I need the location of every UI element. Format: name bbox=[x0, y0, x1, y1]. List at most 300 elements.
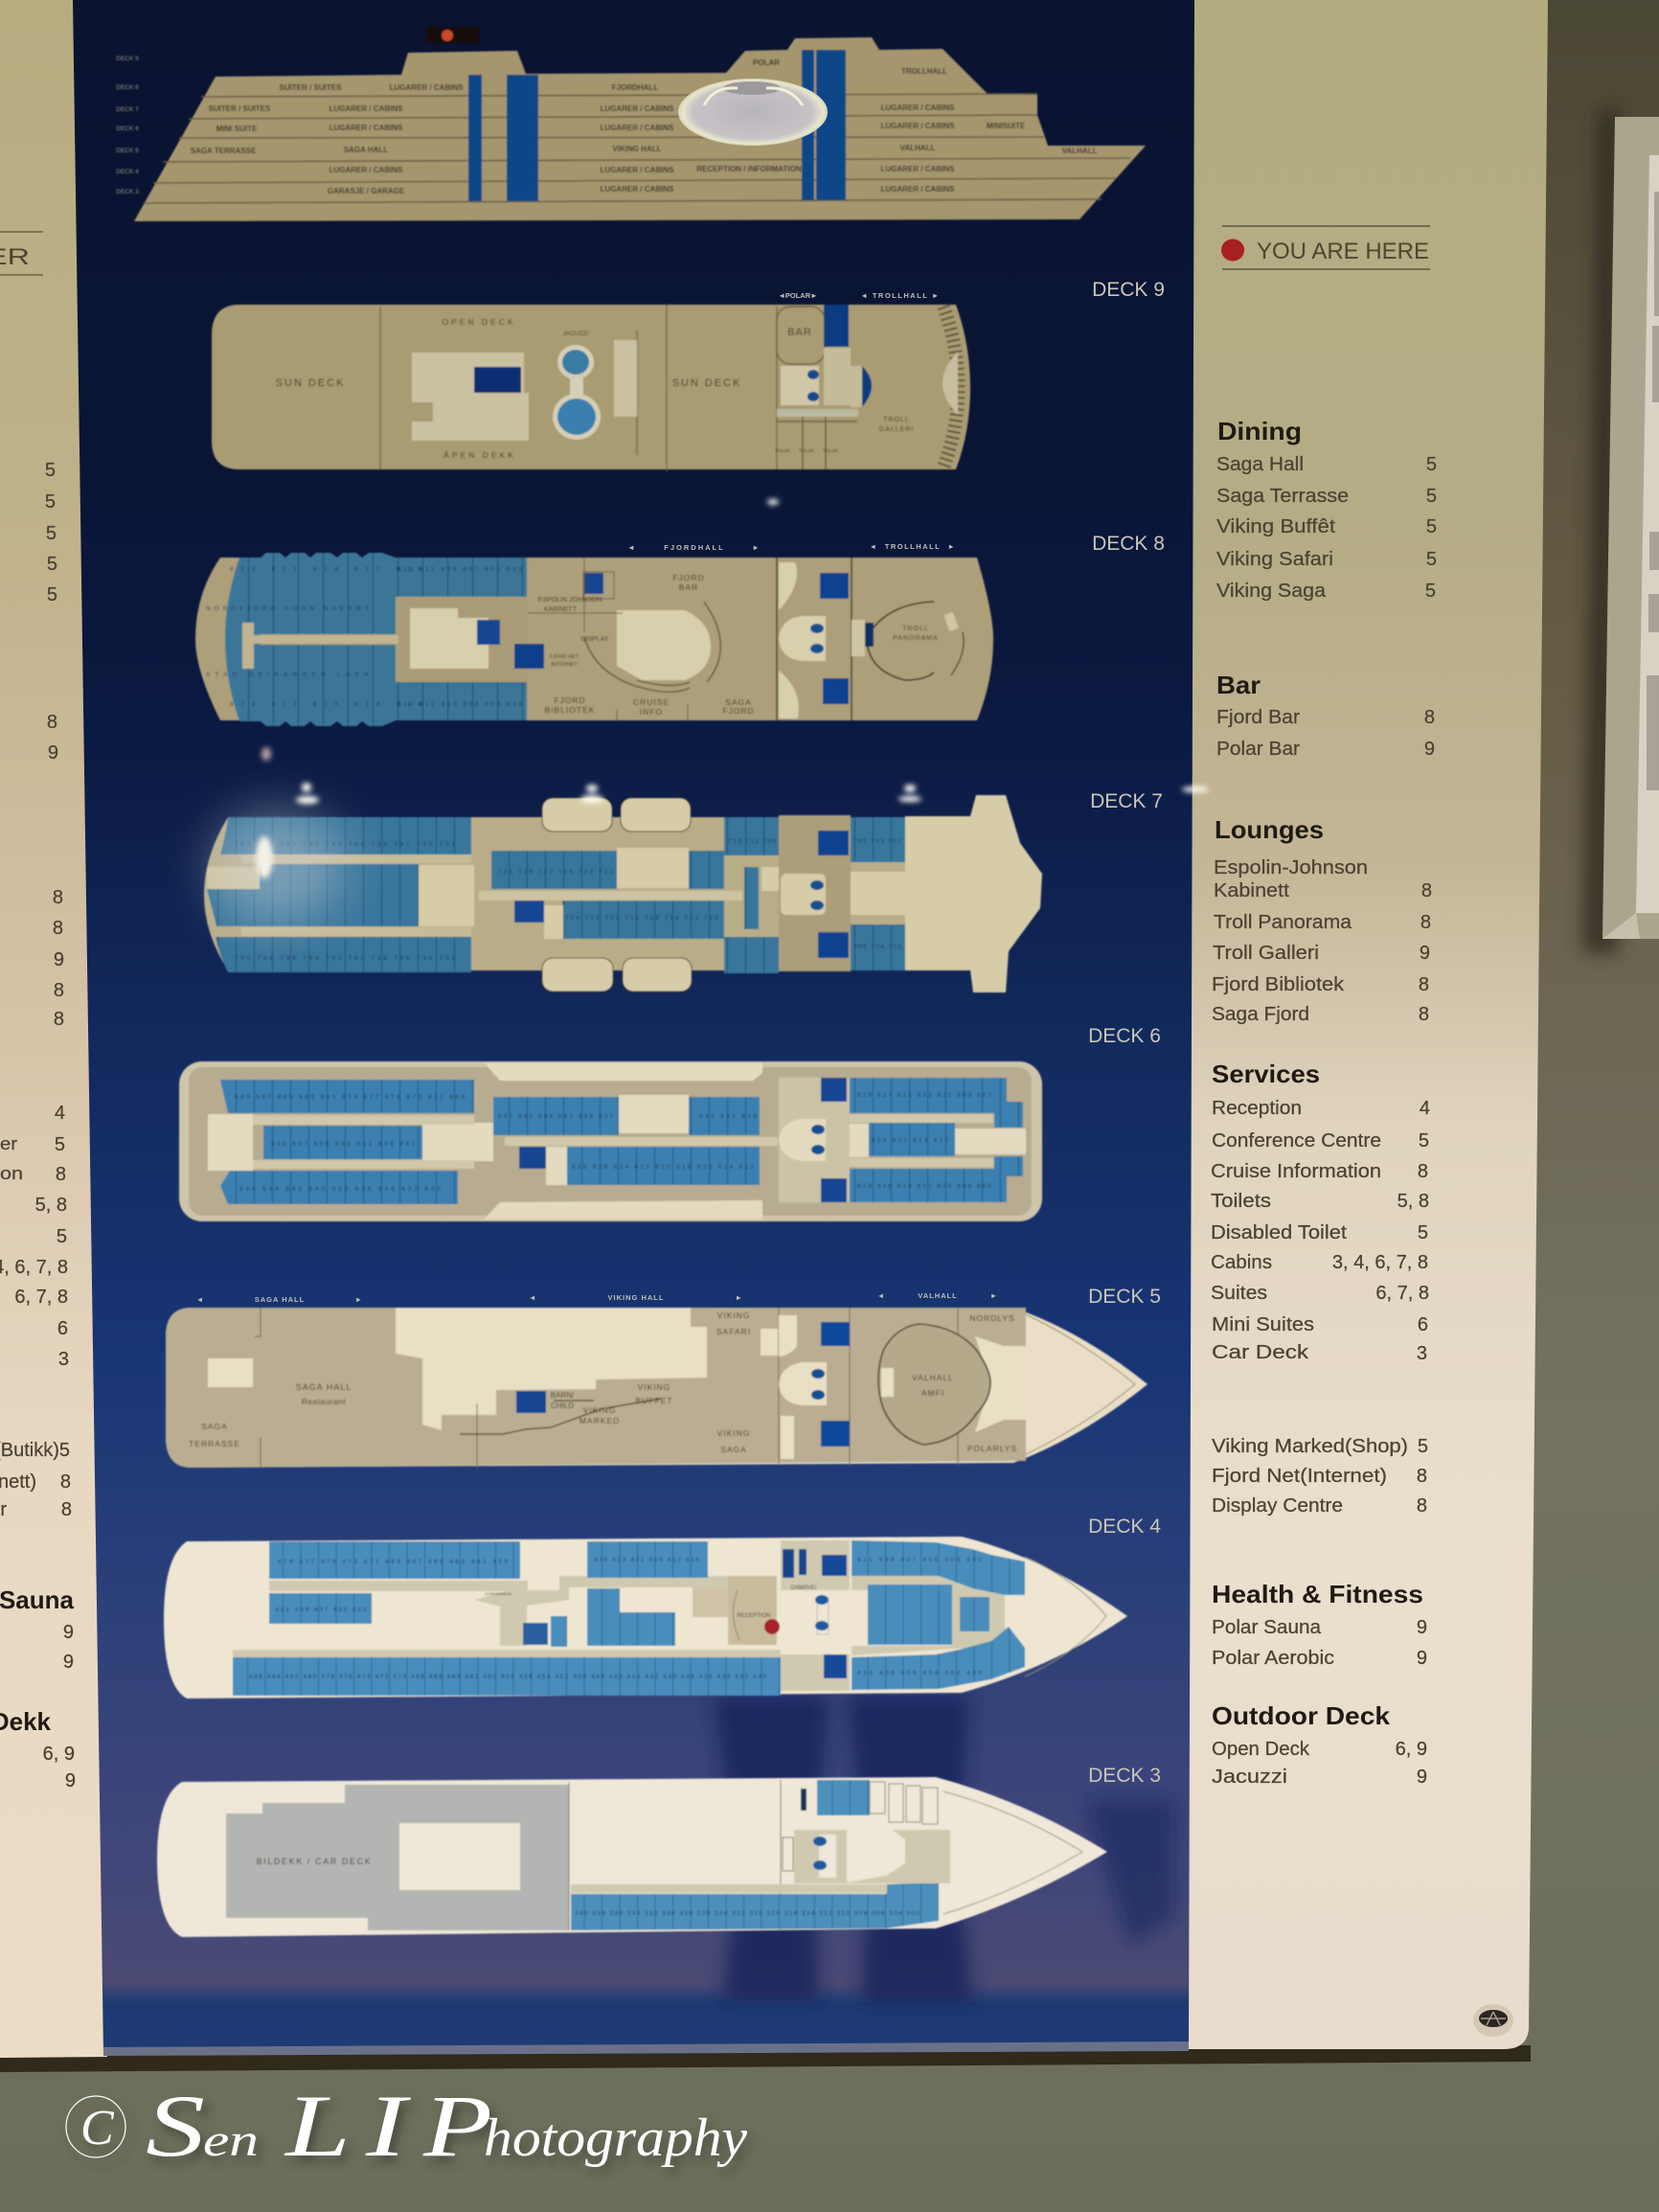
deck 8 section headers bbox=[627, 542, 956, 552]
deck 6 cabin blocks bbox=[220, 1078, 1023, 1204]
index section: Outdoor Deck: Open Deck bbox=[1212, 1739, 1310, 1760]
deck 9 labels: POLAR bbox=[823, 448, 838, 453]
clipped shop rows: 8 bbox=[61, 1499, 72, 1520]
index section: Lounges: Troll Galleri bbox=[1213, 943, 1319, 964]
index section: Services: 4 bbox=[1420, 1098, 1430, 1119]
index section: Services: 5 bbox=[1418, 1222, 1428, 1243]
index section: Dining: Saga Terrasse bbox=[1216, 486, 1349, 507]
deck 6 cabin numbers: 689 687 685 683 681 679 677 675 673 671 669 bbox=[235, 1094, 465, 1101]
deck 4 cabin numbers: 425 423 421 419 417 415 bbox=[594, 1557, 699, 1563]
index section: Lounges: Troll Panorama bbox=[1214, 912, 1352, 933]
deck 9 labels: SUN DECK bbox=[672, 377, 741, 389]
clipped lounge numbers: 8 bbox=[53, 918, 63, 939]
profile deck labels: DECK 5 bbox=[116, 148, 139, 154]
index section: Services: 5, 8 bbox=[1398, 1191, 1429, 1212]
deck 4 labels bbox=[485, 1585, 817, 1619]
clipped outdoor rows: 6, 9 bbox=[43, 1744, 75, 1765]
clipped services rows: 5, 8 bbox=[35, 1195, 67, 1216]
profile cabin labels: LUGARER / CABINS bbox=[601, 104, 674, 113]
deck 5 venue labels: SAGA bbox=[201, 1422, 228, 1431]
profile deck labels: DECK 4 bbox=[116, 169, 139, 175]
index section: Lounges: 8 bbox=[1419, 1004, 1429, 1025]
deck 4 plan bbox=[164, 1537, 1127, 1699]
clipped services rows: 8 bbox=[56, 1164, 66, 1185]
index section: Outdoor Deck: Outdoor Deck bbox=[1212, 1701, 1391, 1730]
deck 8 plan bbox=[195, 553, 993, 726]
deck 7 cabin numbers: 706 704 702 bbox=[853, 944, 901, 950]
deck 7 label: DECK 7 bbox=[1090, 790, 1163, 812]
deck 8 venue labels: BIBLIOTEK bbox=[545, 705, 595, 715]
index section: Bar: Fjord Bar bbox=[1216, 707, 1300, 728]
deck 9 labels: GALLERI bbox=[879, 426, 914, 433]
deck 6 cabin numbers: 628 626 624 622 620 618 616 614 612 bbox=[572, 1164, 754, 1171]
clipped services rows: er bbox=[0, 1134, 17, 1153]
index section: Bar bbox=[1216, 671, 1435, 760]
profile cabin labels: MINI SUITE bbox=[216, 125, 258, 133]
index section: Services: 5 bbox=[1419, 1130, 1429, 1152]
index section: Dining: Viking Buffêt bbox=[1216, 516, 1335, 537]
deck 4 labels: RECEPTION bbox=[737, 1613, 771, 1619]
deck 5 venue labels: NORDLYS bbox=[969, 1313, 1015, 1323]
glass glare reflections bbox=[211, 499, 1209, 924]
deck 5 central void bbox=[396, 1308, 707, 1430]
photographer watermark: S bbox=[146, 2077, 205, 2175]
index section: Shop and internet: Fjord Net(Internet) bbox=[1212, 1466, 1387, 1487]
profile cabin labels: LUGARER / CABINS bbox=[330, 104, 403, 113]
deck 6 cabin numbers bbox=[235, 1092, 991, 1193]
deck 9 section headers: ◄POLAR► bbox=[778, 291, 818, 300]
deck 7 cabin numbers: 751 749 747 745 743 741 739 737 735 733 bbox=[235, 841, 455, 848]
deck 9 labels: TROLL bbox=[883, 417, 910, 423]
index section: Services: Cruise Information bbox=[1211, 1161, 1381, 1182]
index section: Outdoor Deck: Jacuzzi bbox=[1212, 1767, 1287, 1788]
profile cabin labels: LUGARER / CABINS bbox=[601, 185, 674, 194]
deck 9 section headers bbox=[778, 291, 941, 300]
clipped you are here legend bbox=[0, 232, 43, 275]
deck 5 venue labels: SAFARI bbox=[716, 1327, 751, 1336]
profile cabin labels: VALHALL bbox=[1062, 147, 1097, 155]
clipped services rows: 4 bbox=[55, 1103, 65, 1124]
deck 5 venue labels: SAGA bbox=[720, 1445, 747, 1454]
deck 9 central block with lift bbox=[412, 353, 529, 441]
deck 5 venue labels: Restaurant bbox=[302, 1397, 346, 1406]
photographer watermark: C bbox=[80, 2101, 115, 2155]
index section: Lounges: 8 bbox=[1420, 912, 1431, 933]
index section: Dining: Viking Safari bbox=[1216, 549, 1333, 570]
index section: Services: 8 bbox=[1418, 1161, 1428, 1182]
deck 4 labels: CONFERENCE bbox=[485, 1591, 511, 1596]
deck 3 plan: 340 338 336 334 332 330 328 326 324 322 320 318 316 314 312 310 308 306 304 302 bbox=[575, 1910, 920, 1917]
deck 9 polar area bbox=[777, 305, 872, 469]
clipped health rows: 9 bbox=[63, 1652, 74, 1673]
deck 9 labels: OPEN DECK bbox=[442, 317, 516, 327]
troll panorama bbox=[852, 602, 964, 680]
deck 8 stairs and lifts bbox=[776, 558, 852, 720]
funnel logo bbox=[426, 27, 479, 43]
index section: Bar: 9 bbox=[1424, 739, 1435, 760]
index section: Dining: 5 bbox=[1426, 454, 1437, 475]
profile cabin labels: LUGARER / CABINS bbox=[601, 166, 674, 174]
clipped shop rows: r bbox=[0, 1499, 7, 1520]
deck 5 venue labels: CHILD bbox=[551, 1402, 574, 1410]
index section: Dining: Dining bbox=[1217, 417, 1302, 445]
index section: Shop and internet: Display Centre bbox=[1212, 1495, 1343, 1516]
jacuzzi pools bbox=[553, 345, 601, 440]
deck 8 cabin numbers: 824 822 820 818 816 bbox=[230, 701, 421, 708]
deck 8 venue labels bbox=[538, 573, 939, 717]
clipped lounge numbers bbox=[53, 887, 64, 1030]
clipped dining numbers bbox=[45, 460, 57, 605]
deck 6 cabin numbers: 659 657 655 653 651 649 647 bbox=[271, 1141, 415, 1148]
clipped bar numbers bbox=[47, 712, 58, 764]
profile cabin labels bbox=[191, 58, 1097, 195]
deck 7 cabin numbers: 750 748 746 744 742 740 738 736 734 732 bbox=[235, 955, 455, 962]
deck 7 cabin numbers: 724 722 720 718 716 714 712 710 bbox=[565, 915, 718, 922]
index section: Dining: 5 bbox=[1426, 516, 1437, 537]
car deck bbox=[226, 1785, 569, 1930]
deck 9 section headers: ◄ TROLLHALL ► bbox=[860, 291, 941, 300]
deck 9 plan bbox=[212, 305, 970, 471]
clipped lounge numbers: 9 bbox=[54, 949, 64, 970]
index section: Lounges: 9 bbox=[1420, 943, 1430, 964]
index section: Outdoor Deck bbox=[1212, 1701, 1427, 1788]
clipped outdoor rows bbox=[0, 1707, 76, 1791]
ship profile side view bbox=[116, 27, 1146, 221]
index section: Services: Services bbox=[1212, 1060, 1320, 1088]
deck 6 cabin numbers: 618 616 614 612 610 608 606 bbox=[857, 1183, 991, 1190]
deck 6 cabin numbers: 647 645 643 641 639 637 bbox=[498, 1113, 613, 1120]
profile deck labels: DECK 3 bbox=[116, 189, 139, 195]
index section: Services: 3 bbox=[1417, 1343, 1427, 1364]
glass reflection: photographer silhouette bbox=[714, 1696, 1173, 2002]
clipped services rows: 6, 7, 8 bbox=[14, 1287, 68, 1308]
index section: Health and Fitness: Health & Fitness bbox=[1212, 1580, 1423, 1608]
deck 3 plan bbox=[157, 1777, 1107, 1937]
clipped dining numbers: 5 bbox=[47, 554, 57, 575]
deck 7 lift core bbox=[761, 815, 926, 971]
index section: Shop and internet: Viking Marked(Shop) bbox=[1212, 1436, 1408, 1457]
deck 5 venue labels: VIKING bbox=[717, 1311, 750, 1320]
deck 5 venue labels: AMFI bbox=[921, 1388, 944, 1398]
photographer watermark: P bbox=[422, 2077, 492, 2175]
deck 5 venue labels: BARN/ bbox=[551, 1391, 575, 1400]
clipped dining numbers: 5 bbox=[45, 460, 56, 481]
index section: Lounges: Espolin-Johnson bbox=[1214, 857, 1368, 878]
deck 5 venue labels: VALHALL bbox=[912, 1373, 954, 1382]
deck 8 venue labels: SAGA bbox=[725, 697, 752, 707]
deck 5 venue labels: VIKING bbox=[717, 1428, 750, 1438]
profile cabin labels: LUGARER / CABINS bbox=[601, 124, 674, 132]
profile cabin labels: LUGARER / CABINS bbox=[881, 165, 955, 173]
deck 3 lift core bbox=[783, 1789, 950, 1883]
deck 3 label: DECK 3 bbox=[1088, 1765, 1161, 1787]
profile deck labels: DECK 8 bbox=[116, 84, 139, 91]
profile cabin labels: SAGA TERRASSE bbox=[191, 147, 257, 155]
deck 5 venue labels: POLARLYS bbox=[967, 1444, 1017, 1453]
profile cabin labels: LUGARER / CABINS bbox=[881, 103, 955, 112]
deck 5 venue labels: TERRASSE bbox=[189, 1439, 240, 1448]
deck 9 labels: SUN DECK bbox=[276, 377, 345, 389]
deck 6 cabin numbers: 646 644 642 640 638 636 634 632 630 bbox=[239, 1186, 441, 1193]
index section: Services: Suites bbox=[1211, 1283, 1267, 1304]
index section: Dining: Viking Saga bbox=[1216, 581, 1327, 602]
deck 5 section headers: ◄ VIKING HALL ► bbox=[529, 1293, 743, 1302]
profile deck labels: DECK 7 bbox=[116, 106, 139, 113]
deck 6 cabin numbers: 619 617 615 613 611 609 607 bbox=[857, 1092, 991, 1099]
clipped dining numbers: 5 bbox=[47, 584, 57, 605]
you are here marker deck 4 bbox=[764, 1619, 780, 1634]
photographer watermark bbox=[66, 2077, 747, 2175]
left white strip of poster bbox=[0, 0, 107, 2058]
deck 7 cabin numbers: 731 729 727 725 723 721 bbox=[498, 869, 613, 876]
profile cabin labels: SUITER / SUITES bbox=[209, 104, 271, 113]
index section: Lounges: 8 bbox=[1421, 880, 1432, 901]
index section: Services: Reception bbox=[1212, 1098, 1302, 1119]
deck 6 plan bbox=[179, 1061, 1042, 1221]
clipped bar numbers: 8 bbox=[47, 712, 57, 733]
deck 7 cabin numbers: 713 711 709 bbox=[728, 838, 776, 845]
red dot bbox=[1221, 239, 1244, 261]
profile cabin labels: SAGA HALL bbox=[344, 146, 388, 154]
index section: Bar: Polar Bar bbox=[1216, 739, 1300, 760]
photographer watermark: I bbox=[365, 2077, 412, 2175]
deck 8 venue labels: PANORAMA bbox=[893, 635, 939, 642]
framed notice on wall bbox=[1582, 105, 1659, 953]
deck 4 cabin numbers: 441 439 437 435 433 bbox=[276, 1607, 367, 1613]
deck 8 corridor bbox=[242, 623, 398, 669]
deck 8 cabin numbers: 814 812 810 808 806 804 bbox=[398, 701, 522, 708]
clipped lounge numbers: 8 bbox=[53, 887, 63, 908]
clipped health rows: 9 bbox=[63, 1622, 74, 1643]
index section: Bar: Bar bbox=[1216, 671, 1261, 699]
deck 5 section headers: ◄ SAGA HALL ► bbox=[196, 1295, 363, 1304]
profile cabin labels: TROLLHALL bbox=[901, 67, 947, 76]
deck 3 plan: BILDEKK / CAR DECK bbox=[257, 1857, 372, 1866]
index section: Dining bbox=[1216, 417, 1437, 602]
deck 5 label: DECK 5 bbox=[1088, 1286, 1161, 1308]
index section: Dining: Saga Hall bbox=[1216, 454, 1304, 475]
deck 4 central lobby bbox=[523, 1540, 850, 1691]
index section: Services bbox=[1211, 1060, 1430, 1364]
profile cabin labels: VALHALL bbox=[900, 144, 935, 152]
clipped lounge numbers: 8 bbox=[54, 980, 64, 1001]
clipped dining numbers: 5 bbox=[46, 523, 57, 544]
icon: mounting screw bbox=[1473, 2004, 1513, 2037]
deck 8 venue labels: FJORD bbox=[722, 706, 755, 716]
profile cabin labels: MINISUITE bbox=[987, 122, 1026, 130]
deck 9 labels bbox=[276, 317, 914, 460]
deck 5 venue labels bbox=[189, 1311, 1017, 1454]
deck 8 venue labels: CRUISE bbox=[633, 697, 670, 707]
deck 3 forward cells bbox=[870, 1782, 938, 1824]
deck 9 labels: POLAR bbox=[799, 448, 814, 453]
profile cabin labels: RECEPTION / INFORMATION bbox=[696, 165, 802, 173]
index section: Services: 6, 7, 8 bbox=[1375, 1283, 1429, 1304]
clipped services rows bbox=[0, 1103, 69, 1370]
profile cabin labels: POLAR bbox=[753, 58, 780, 67]
index section: Shop and internet: 5 bbox=[1418, 1436, 1428, 1457]
index section: Health and Fitness: Polar Sauna bbox=[1212, 1617, 1322, 1638]
deck 7 bow open deck bbox=[905, 795, 1042, 992]
deck 8 cabin numbers: 823 821 819 817 815 bbox=[230, 566, 421, 573]
deck 8 section headers: ◄ TROLLHALL ► bbox=[870, 542, 956, 551]
index section: Lounges: 8 bbox=[1419, 974, 1429, 995]
deck 5 section headers bbox=[196, 1291, 998, 1304]
index section: Services: 6 bbox=[1418, 1314, 1428, 1335]
clipped lounge numbers: 8 bbox=[54, 1009, 64, 1030]
deck 5 venue labels: SAGA HALL bbox=[296, 1382, 352, 1392]
deck 9 labels: ÅPEN DEKK bbox=[443, 450, 516, 460]
fjord hall atrium bbox=[617, 610, 711, 680]
index section: Bar: 8 bbox=[1424, 707, 1435, 728]
index section: Services: Car Deck bbox=[1212, 1342, 1309, 1363]
deck 8 cabins aft bbox=[225, 553, 527, 726]
deck 8 venue labels: FJORD bbox=[672, 573, 705, 582]
index section: Services: Cabins bbox=[1211, 1252, 1272, 1273]
index section: Services: Mini Suites bbox=[1212, 1314, 1314, 1335]
deck 4 cabin numbers: 486 484 482 480 478 476 474 472 470 468 466 464 462 460 458 456 454 452 450 448 446 444 442 440 438 436 434 432 430 bbox=[249, 1674, 766, 1680]
reception area bbox=[693, 1576, 777, 1645]
clipped health rows: Sauna bbox=[0, 1585, 75, 1614]
photographer watermark: hotography bbox=[484, 2109, 747, 2168]
index section: Health and Fitness: 9 bbox=[1417, 1648, 1427, 1669]
profile cabin labels: LUGARER / CABINS bbox=[390, 83, 464, 92]
index section: Shop and internet bbox=[1212, 1436, 1428, 1516]
profile deck labels: DECK 6 bbox=[116, 125, 139, 132]
deck 4 cabin numbers: 410 408 406 404 402 400 bbox=[857, 1670, 982, 1676]
deck 3 cabins bbox=[571, 1780, 939, 1930]
you are here legend bbox=[1221, 226, 1430, 269]
poster shadow along the bottom edge bbox=[0, 2045, 1531, 2072]
deck 7 lifeboats bbox=[542, 798, 692, 992]
index section: Lounges bbox=[1212, 815, 1432, 1025]
deck 6 cabin numbers: 623 621 619 617 bbox=[872, 1137, 948, 1144]
deck 8 cabin numbers: 813 811 809 807 805 803 bbox=[398, 566, 522, 573]
index section: Services: Conference Centre bbox=[1212, 1130, 1381, 1152]
index section: Outdoor Deck: 6, 9 bbox=[1396, 1739, 1427, 1760]
clipped services rows: 6 bbox=[57, 1318, 68, 1339]
clipped bar numbers: 9 bbox=[48, 742, 58, 764]
deck 4 cabin numbers bbox=[249, 1557, 982, 1680]
clipped outdoor rows: 9 bbox=[65, 1770, 76, 1791]
deck 5 venue labels: MARKED bbox=[580, 1416, 620, 1425]
profile cabin labels: LUGARER / CABINS bbox=[881, 185, 955, 194]
deck 5 section headers: ◄ VALHALL ► bbox=[877, 1291, 998, 1300]
deck 6 label: DECK 6 bbox=[1088, 1025, 1161, 1047]
clipped services rows: on bbox=[0, 1164, 23, 1183]
deck 5 venue labels: BUFFET bbox=[635, 1396, 673, 1405]
deck 8 venue labels: INFO bbox=[640, 707, 663, 717]
index section: Health and Fitness: Polar Aerobic bbox=[1212, 1648, 1334, 1669]
deck 8 section headers: ◄ FJORDHALL ► bbox=[627, 543, 761, 552]
clipped health rows bbox=[0, 1585, 75, 1673]
funnel stripes bbox=[468, 50, 846, 201]
index section: Dining: 5 bbox=[1426, 549, 1437, 570]
deck 8 venue labels: FJORD NET bbox=[550, 654, 580, 660]
deck 5 venue labels: VIKING bbox=[583, 1405, 616, 1415]
deck 8 venue labels: ESPOLIN JOHNSON bbox=[538, 597, 602, 604]
valhall amphitheatre bbox=[878, 1324, 1026, 1445]
deck 8 venue labels: TROLL bbox=[902, 626, 929, 632]
profile cabin labels: GARASJE / GARAGE bbox=[328, 187, 405, 195]
index section: Lounges: Saga Fjord bbox=[1212, 1004, 1309, 1025]
deck 4 labels: DAMSVEI bbox=[790, 1585, 817, 1591]
deck 9 labels: BAR bbox=[787, 327, 812, 338]
index section: Shop and internet: 8 bbox=[1417, 1466, 1427, 1487]
deck 7 plan bbox=[204, 795, 1042, 992]
deck 4 label: DECK 4 bbox=[1088, 1516, 1161, 1538]
profile cabin labels: FJORDHALL bbox=[612, 83, 658, 92]
profile cabin labels: LUGARER / CABINS bbox=[881, 122, 955, 130]
clipped services rows: 5 bbox=[57, 1226, 67, 1247]
photographer watermark: L bbox=[283, 2077, 351, 2175]
deck 8 venue labels: KABINETT bbox=[544, 606, 578, 613]
profile cabin labels: SUITER / SUITES bbox=[280, 83, 342, 92]
left panel partial index bbox=[0, 232, 76, 1791]
deck 8 venue labels: FJORD bbox=[554, 696, 586, 705]
profile cabin labels: VIKING HALL bbox=[612, 145, 662, 153]
clipped dining numbers: 5 bbox=[45, 491, 56, 513]
deck 6 lift core bbox=[519, 1078, 850, 1202]
deck 4 cabin blocks bbox=[233, 1540, 1025, 1696]
deck 9 labels: JACUZZI bbox=[563, 331, 589, 337]
deck 8 venue labels: INTERNET bbox=[551, 662, 578, 668]
index section: Dining: 5 bbox=[1425, 581, 1436, 602]
bottom glass highlight bbox=[103, 2041, 1189, 2056]
index section: Health and Fitness bbox=[1212, 1580, 1427, 1669]
clipped services rows: 3 bbox=[58, 1349, 69, 1370]
deck 4 cabin numbers: 411 409 407 405 403 401 bbox=[857, 1557, 982, 1563]
index section: Outdoor Deck: 9 bbox=[1417, 1767, 1427, 1788]
you are here legend: YOU ARE HERE bbox=[1257, 239, 1429, 264]
index section: Lounges: Kabinett bbox=[1214, 880, 1289, 901]
deck 8 cabin numbers bbox=[206, 566, 522, 708]
deck 8 cabin numbers: STAD GEIRANGER LOEN bbox=[206, 672, 369, 678]
deck 5 lift core bbox=[761, 1315, 850, 1459]
profile cabin labels: LUGARER / CABINS bbox=[330, 166, 403, 174]
blue central panel bbox=[73, 0, 1194, 2055]
index section: Lounges: Fjord Bibliotek bbox=[1212, 974, 1345, 995]
index section: Services: 3, 4, 6, 7, 8 bbox=[1332, 1252, 1428, 1273]
index section: Dining: 5 bbox=[1426, 486, 1437, 507]
deck 9 labels: POLAR bbox=[775, 448, 790, 453]
deck 6 cabin numbers: 633 631 629 bbox=[699, 1113, 757, 1120]
lamp reflection bbox=[678, 79, 828, 146]
clipped shop rows bbox=[0, 1440, 72, 1520]
profile deck labels bbox=[116, 56, 139, 195]
deck 9 label: DECK 9 bbox=[1092, 279, 1165, 301]
clipped services rows: 5 bbox=[55, 1134, 65, 1155]
deck 4 corridors bbox=[233, 1576, 1005, 1657]
profile cabin labels: LUGARER / CABINS bbox=[330, 124, 403, 132]
profile deck labels: DECK 9 bbox=[116, 56, 139, 62]
clipped shop rows: 8 bbox=[60, 1471, 71, 1493]
deck 7 cabin numbers bbox=[235, 838, 901, 962]
index section: Services: Disabled Toilet bbox=[1211, 1222, 1347, 1243]
deck 8 label: DECK 8 bbox=[1092, 533, 1165, 555]
deck 8 venue labels: DISPLAY bbox=[580, 636, 609, 643]
index section: Health and Fitness: 9 bbox=[1417, 1617, 1427, 1638]
deck 7 cabin numbers: 705 703 701 bbox=[853, 838, 901, 845]
index section: Lounges: Lounges bbox=[1215, 815, 1324, 844]
index section: Services: Toilets bbox=[1211, 1191, 1271, 1212]
deck 5 venue labels: VIKING bbox=[638, 1382, 670, 1392]
deck 5 plan bbox=[166, 1308, 1148, 1468]
photographer watermark: en bbox=[203, 2115, 259, 2166]
deck 8 cabin numbers: NORDFJORD SOGN NAERØY bbox=[206, 605, 370, 612]
index section: Shop and internet: 8 bbox=[1417, 1495, 1427, 1516]
deck 4 cabin numbers: 479 477 475 473 471 469 467 465 463 461 459 bbox=[278, 1559, 508, 1565]
